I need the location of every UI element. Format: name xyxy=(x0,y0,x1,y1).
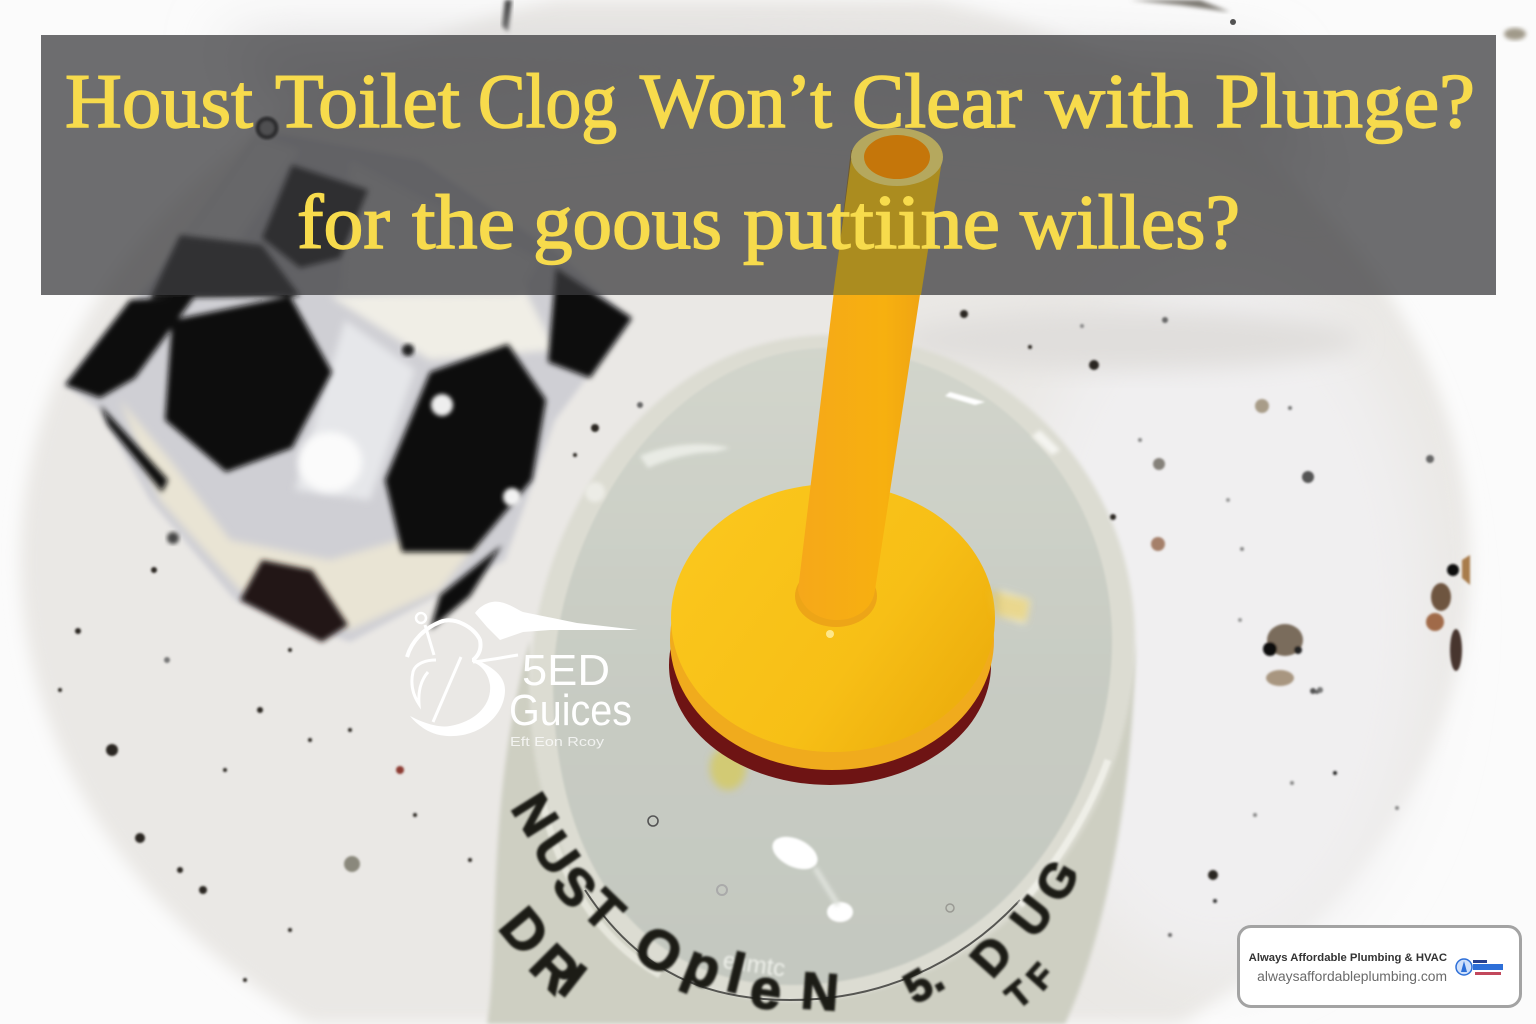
title line 2: willes? xyxy=(1020,179,1240,265)
title line 1: Plunge? xyxy=(1215,58,1475,144)
title line 1 xyxy=(65,58,1475,144)
logo text Guices: Guices xyxy=(509,686,632,735)
title line 1: Won’t xyxy=(640,58,832,144)
title line 1: Clog xyxy=(478,58,617,144)
logo bird emblem xyxy=(407,602,638,736)
debris cluster center right xyxy=(1263,624,1316,694)
plunger handle xyxy=(798,150,942,620)
printed letters around drain: S xyxy=(541,855,608,919)
watermark logo xyxy=(407,602,638,749)
printed letters around drain: p xyxy=(676,931,731,1002)
printed letters around drain: N xyxy=(799,962,841,1023)
title line 1: with xyxy=(1045,58,1193,144)
company website: alwaysaffordableplumbing.com xyxy=(1257,968,1447,984)
printed letters around drain: 5. xyxy=(896,953,952,1014)
debris cluster right edge xyxy=(1426,555,1470,671)
printed letters around drain: e xyxy=(746,955,786,1022)
plunger xyxy=(669,150,1030,785)
drain throat wall xyxy=(487,640,1135,1024)
title line 2 xyxy=(297,179,1240,265)
logo tagline: Eft Eon Rcoy xyxy=(510,734,605,749)
printed letters around drain: D xyxy=(961,926,1023,987)
title line 1: Toilet xyxy=(275,58,460,144)
handle top seen through banner xyxy=(833,128,943,295)
attribution badge xyxy=(1237,925,1522,1008)
plunger disk xyxy=(669,545,991,785)
title banner xyxy=(41,35,1496,295)
title line 2: the xyxy=(412,179,515,265)
printed letters around drain: I xyxy=(549,954,596,1008)
printed letters around drain: D xyxy=(488,895,562,967)
black panels xyxy=(65,165,632,642)
printed letters around drain: O xyxy=(624,912,694,988)
printed letters around drain: l xyxy=(721,941,751,1005)
printed letters around drain: R xyxy=(519,932,592,1005)
title line 1: Clear xyxy=(852,58,1022,144)
title line 2: goous xyxy=(533,179,722,265)
printed letters around drain: N xyxy=(500,784,569,846)
water pool xyxy=(530,335,1135,1000)
title line 1: Houst xyxy=(65,58,253,144)
specks of debris xyxy=(58,310,1470,982)
logo text 5ED: 5ED xyxy=(522,646,610,695)
printed letters around drain: F xyxy=(1020,956,1062,997)
company name: Always Affordable Plumbing & HVAC xyxy=(1249,952,1447,964)
printed letters around drain xyxy=(488,784,1090,1023)
printed letters around drain: U xyxy=(521,822,590,886)
soccer-ball shaped object xyxy=(65,119,632,642)
title line 2: puttiine xyxy=(743,179,1000,265)
printed letters around drain: G xyxy=(1026,852,1090,910)
company mini logo xyxy=(1455,958,1503,976)
water pool: elimtc xyxy=(721,947,787,983)
title line 2: for xyxy=(297,179,390,265)
printed letters around drain: T xyxy=(999,974,1039,1016)
printed letters around drain: U xyxy=(1001,887,1064,947)
printed letters around drain: T xyxy=(572,879,635,943)
